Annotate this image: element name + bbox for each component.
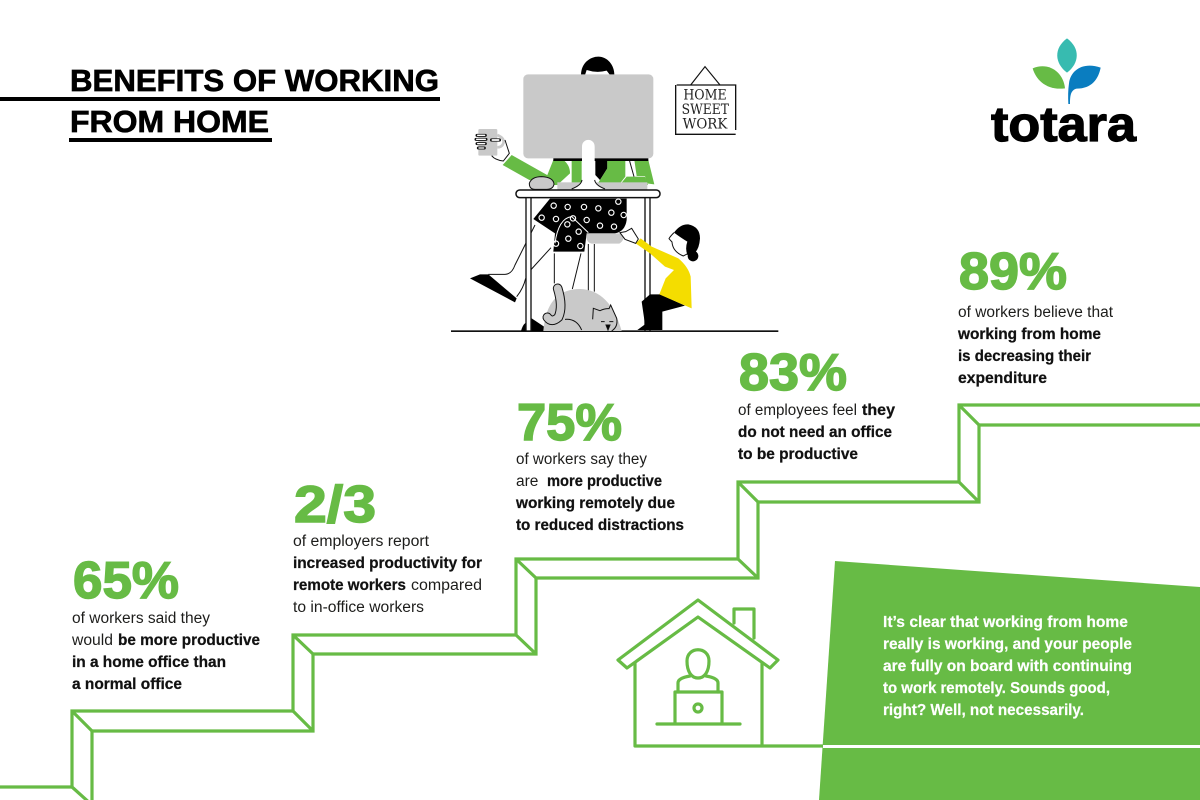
stat: 2/3 [293, 476, 482, 616]
stat: 89%: working from home [957, 326, 1101, 343]
stat: 83%: they [862, 402, 895, 419]
sign: home sweet work: HOME [683, 87, 727, 103]
stat: 75% [515, 394, 684, 534]
stat: 83%: do not need an office [738, 424, 892, 441]
person [678, 650, 718, 692]
stat: 65%: would [71, 632, 113, 649]
hand and mug [476, 129, 509, 161]
keyboard and mouse [529, 177, 647, 190]
stat: 2/3: remote workers [293, 577, 406, 594]
panel: conclusion callout: right? Well, not necessarily. [883, 702, 1084, 719]
laptop on desk [657, 692, 740, 724]
stat: 75%: to reduced distractions [516, 517, 684, 534]
house roof [618, 600, 778, 668]
stat: 65% [71, 552, 260, 693]
desk legs [526, 198, 650, 331]
logo wordmark: totara [991, 98, 1137, 152]
skirt with dots [533, 199, 627, 252]
logo: totara [991, 38, 1137, 152]
staircase outline [0, 405, 1200, 800]
stat: 83%: 83% [739, 344, 847, 402]
stat: 2/3: increased productivity for [293, 555, 482, 572]
panel: conclusion callout: really is working, and your people [883, 636, 1132, 653]
stat: 65%: of workers said they [72, 610, 210, 627]
stat: 75%: working remotely due [515, 495, 675, 512]
panel: conclusion callout [819, 561, 1200, 800]
logo leaves [1033, 38, 1101, 104]
sign: home sweet work: WORK [683, 116, 728, 132]
title [0, 63, 440, 142]
stat: 65%: 65% [73, 552, 179, 610]
chair [586, 233, 624, 292]
panel: conclusion callout: are fully on board with continuing [883, 658, 1132, 675]
stat: 89%: is decreasing their [958, 348, 1091, 365]
stat: 2/3: to in-office workers [293, 599, 424, 616]
legs and shoe [470, 225, 581, 331]
cat [543, 288, 622, 331]
house walls and floor [635, 663, 823, 746]
desk top [516, 190, 660, 198]
icon: house with remote worker [618, 600, 823, 746]
panel: conclusion callout: to work remotely. Sounds good, [883, 680, 1110, 697]
stat: 89%: 89% [959, 243, 1067, 301]
stat: 83% [738, 344, 895, 463]
stat: 2/3: 2/3 [294, 476, 376, 534]
stat: 75%: more productive [547, 473, 662, 490]
monitor stand [572, 140, 605, 189]
illustration: woman working at desk with child and cat [451, 57, 778, 332]
stat: 75%: are [516, 473, 538, 490]
stat: 2/3: compared [411, 577, 482, 594]
stat: 83%: of employees feel [738, 402, 857, 419]
floor line [451, 330, 778, 332]
stat: 2/3: of employers report [293, 533, 430, 550]
child in yellow [620, 224, 700, 330]
torso and arms [503, 155, 654, 185]
stat: 75%: of workers say they [516, 451, 647, 468]
stat: 65%: in a home office than [72, 654, 226, 671]
laptop camera [694, 704, 702, 712]
title: BENEFITS OF WORKING [70, 63, 439, 98]
stat: 65%: a normal office [72, 676, 182, 693]
title: FROM HOME [70, 104, 269, 139]
sign: home sweet work: SWEET [682, 102, 729, 118]
stat: 89%: of workers believe that [958, 304, 1114, 321]
chimney [734, 609, 754, 638]
stat: 83%: to be productive [738, 446, 858, 463]
monitor [523, 74, 653, 158]
panel: conclusion callout: It’s clear that working from home [883, 614, 1128, 631]
stat: 75%: 75% [517, 394, 622, 452]
stat: 65%: be more productive [118, 632, 260, 649]
stat: 89% [957, 243, 1114, 387]
sign: home sweet work [676, 67, 736, 134]
stat: 89%: expenditure [958, 370, 1047, 387]
head of worker [581, 57, 614, 75]
face [585, 70, 610, 75]
